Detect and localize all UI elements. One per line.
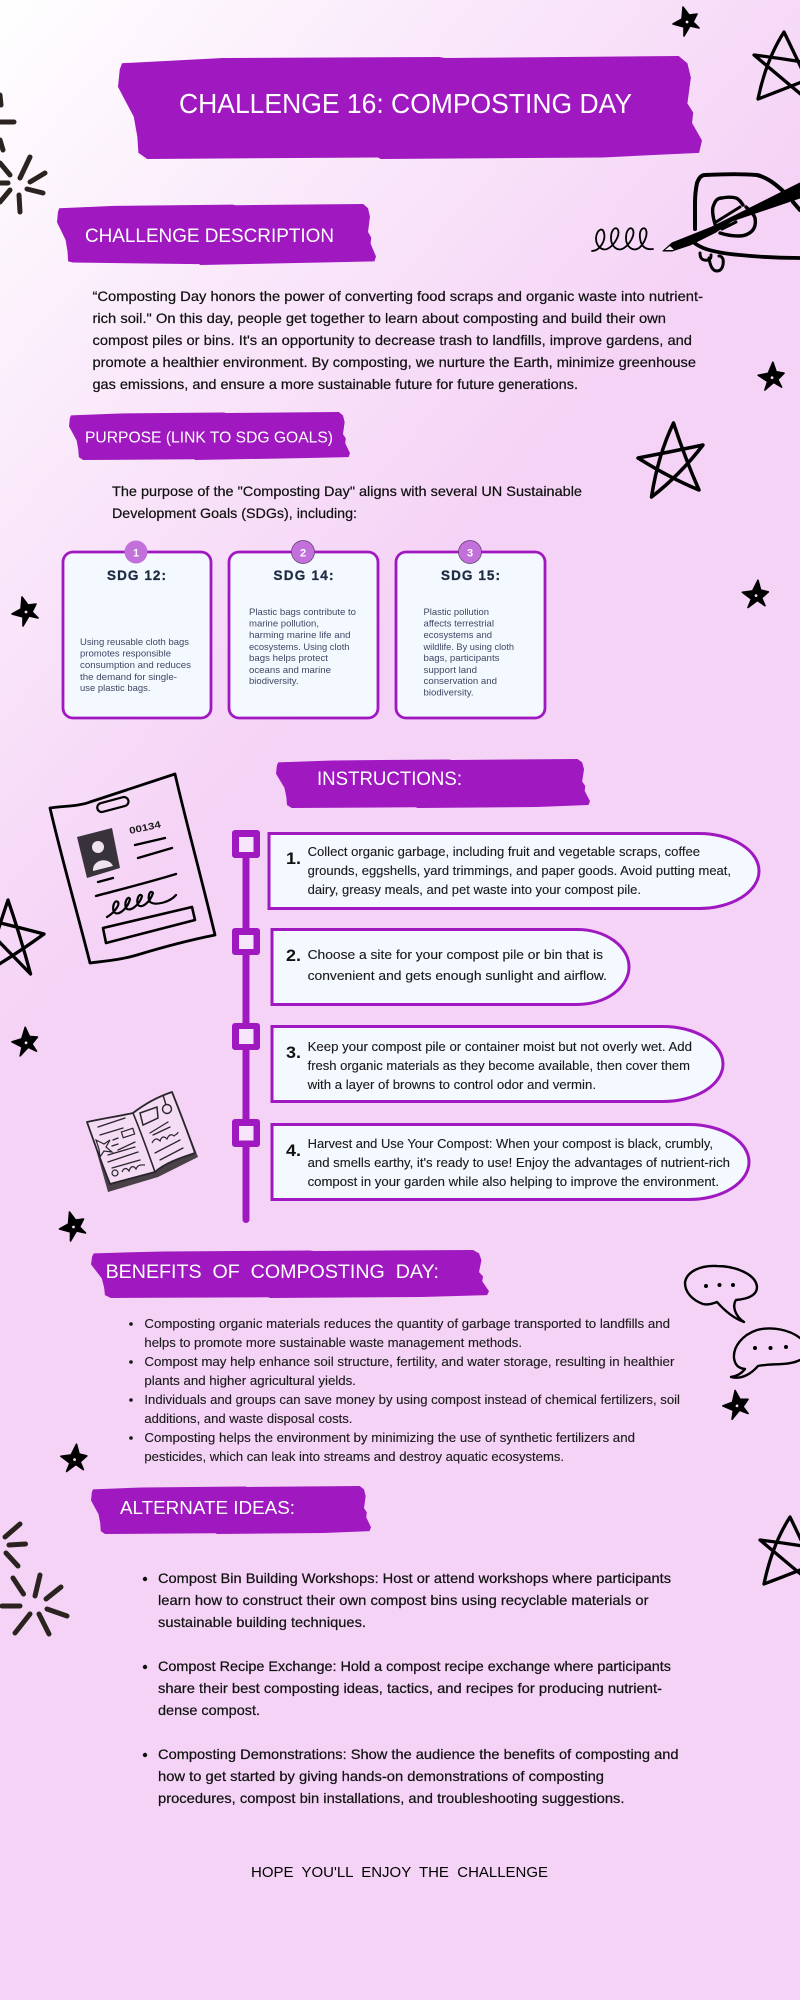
- panel: step 4: Harvest and Use Your Compost: When your compost is black, crumbly,: [308, 1136, 713, 1151]
- icon: small star right middle: [738, 576, 773, 613]
- text block: benefits list: Composting organic materials reduces the quantity of garbage transported to landfills and: [144, 1316, 670, 1331]
- text block: description: rich soil." On this day, people get together to learn about composting and build their own: [92, 310, 666, 326]
- text block: description: promote a healthier environment. By composting, we nurture the Earth, minimize greenhouse: [92, 354, 696, 370]
- text block: benefits list: additions, and waste disposal costs.: [144, 1411, 352, 1426]
- section heading: challenge description: [57, 204, 376, 265]
- panel: SDG 15 card: conservation and: [424, 676, 497, 687]
- panel: SDG 15 card: bags, participants: [424, 653, 500, 664]
- panel: SDG 15 card: affects terrestrial: [424, 619, 494, 630]
- section heading: alternate ideas: ALTERNATE IDEAS:: [120, 1498, 295, 1518]
- panel: step 4: and smells earthy, it's ready to use! Enjoy the advantages of nutrient-rich: [308, 1155, 730, 1170]
- panel: SDG 14 card: harming marine life and: [249, 630, 350, 641]
- section heading: instructions: INSTRUCTIONS:: [317, 769, 462, 790]
- text block: alternate ideas list: [143, 1570, 679, 1806]
- text block: alternate ideas list: dense compost.: [158, 1702, 260, 1718]
- panel: SDG 12 card: [63, 540, 211, 718]
- text block: description: compost piles or bins. It's an opportunity to decrease trash to landfills, improve gardens, and: [92, 332, 692, 348]
- icon: open book doodle: [87, 1092, 198, 1192]
- text block: description: [92, 288, 703, 392]
- icon: ID badge doodle: [50, 774, 215, 963]
- panel: step 3: Keep your compost pile or container moist but not overly wet. Add: [308, 1039, 692, 1054]
- icon: small star beside bubbles: [721, 1389, 751, 1421]
- text block: alternate ideas list: procedures, compost bin installations, and troubleshooting suggestions.: [158, 1790, 624, 1806]
- icon: small star right: [754, 359, 788, 395]
- text block: benefits list: Compost may help enhance soil structure, fertility, and water storage, resulting in healthier: [144, 1354, 675, 1369]
- panel: SDG 12 card: the demand for single-: [80, 672, 177, 683]
- panel: SDG 14 card: ecosystems. Using cloth: [249, 642, 350, 653]
- text block: benefits list: [129, 1316, 680, 1464]
- icon: star outline left: [0, 900, 44, 974]
- section heading: purpose: PURPOSE (LINK TO SDG GOALS): [85, 430, 333, 446]
- panel: step 2: convenient and gets enough sunlight and airflow.: [308, 968, 607, 983]
- panel: step 4: 4.: [286, 1141, 301, 1160]
- text block: benefits list: pesticides, which can leak into streams and destroy aquatic ecosystems.: [144, 1449, 564, 1464]
- icon: star outline top right: [754, 32, 800, 112]
- title banner: [118, 56, 702, 159]
- icon: sparkle lower left: [2, 1524, 67, 1634]
- icon: ID badge doodle: 00134: [128, 819, 163, 837]
- text block: purpose intro: Development Goals (SDGs), including:: [112, 505, 357, 521]
- icon: speech bubble lower: [731, 1328, 800, 1378]
- closing line: HOPE YOU'LL ENJOY THE CHALLENGE: [251, 1864, 548, 1881]
- panel: step 2: [272, 930, 629, 1004]
- panel: SDG 15 card: wildlife. By using cloth: [423, 642, 514, 653]
- text block: benefits list: Individuals and groups can save money by using compost instead of chemical fertilizers, soil: [144, 1392, 680, 1407]
- panel: SDG 12 card: Using reusable cloth bags: [80, 637, 189, 648]
- icon: hand writing with pen: [592, 174, 800, 271]
- panel: SDG 14 card: marine pollution,: [249, 619, 319, 630]
- text block: alternate ideas list: learn how to construct their own compost bins using recyclable materials or: [158, 1592, 649, 1608]
- title text: CHALLENGE 16: COMPOSTING DAY: [179, 88, 632, 119]
- text block: benefits list: Composting helps the environment by minimizing the use of synthetic fertilizers and: [144, 1430, 635, 1445]
- panel: step 1: dairy, greasy meals, and pet waste into your compost pile.: [308, 882, 641, 897]
- panel: SDG 15 card: 3: [467, 548, 473, 560]
- text block: description: “Composting Day honors the power of converting food scraps and organic waste into nutrient-: [92, 288, 703, 304]
- icon: small star left lower: [9, 1025, 41, 1059]
- panel: SDG 14 card: SDG 14:: [274, 568, 334, 583]
- panel: SDG 15 card: [396, 540, 545, 718]
- text block: alternate ideas list: sustainable building techniques.: [158, 1614, 366, 1630]
- panel: SDG 14 card: 2: [300, 548, 306, 560]
- chart: vertical timeline: [232, 830, 260, 1223]
- panel: SDG 15 card: SDG 15:: [441, 568, 500, 583]
- text block: benefits list: helps to promote more sustainable waste management methods.: [144, 1335, 522, 1350]
- icon: star outline lower right: [760, 1517, 800, 1597]
- panel: step 3: fresh organic materials as they become available, then cover them: [308, 1058, 690, 1073]
- panel: SDG 14 card: [229, 540, 378, 718]
- section heading: benefits: BENEFITS OF COMPOSTING DAY:: [106, 1262, 439, 1283]
- panel: SDG 12 card: 1: [133, 548, 139, 560]
- text block: alternate ideas list: Composting Demonstrations: Show the audience the benefits of composting and: [158, 1746, 678, 1762]
- section heading: purpose: [69, 412, 350, 460]
- panel: SDG 12 card: promotes responsible: [80, 649, 171, 660]
- icon: speech bubble upper: [685, 1266, 757, 1322]
- text block: alternate ideas list: Compost Bin Building Workshops: Host or attend workshops where participants: [158, 1570, 671, 1586]
- panel: SDG 12 card: SDG 12:: [107, 568, 166, 583]
- panel: step 4: [272, 1124, 749, 1200]
- icon: small star top: [673, 7, 699, 36]
- panel: SDG 15 card: support land: [424, 665, 477, 676]
- panel: step 2: 2.: [286, 946, 301, 965]
- text block: alternate ideas list: how to get started by giving hands-on demonstrations of composting: [158, 1768, 604, 1784]
- panel: step 1: grounds, eggshells, yard trimmings, and paper goods. Avoid putting meat,: [308, 863, 731, 878]
- text block: purpose intro: The purpose of the "Composting Day" aligns with several UN Sustainable: [112, 483, 582, 499]
- panel: SDG 15 card: biodiversity.: [424, 688, 474, 698]
- panel: SDG 14 card: bags helps protect: [249, 653, 328, 664]
- panel: SDG 14 card: oceans and marine: [249, 665, 331, 676]
- panel: step 3: with a layer of browns to control odor and vermin.: [307, 1077, 596, 1092]
- icon: star outline middle right: [638, 423, 703, 497]
- panel: step 1: 1.: [286, 849, 301, 868]
- panel: SDG 14 card: biodiversity.: [249, 676, 298, 687]
- panel: step 2: Choose a site for your compost pile or bin that is: [308, 947, 604, 962]
- text block: alternate ideas list: Compost Recipe Exchange: Hold a compost recipe exchange where participants: [158, 1658, 671, 1674]
- icon: small star beside list: [56, 1440, 91, 1477]
- icon: sparkle top left: [0, 95, 45, 212]
- panel: SDG 14 card: Plastic bags contribute to: [249, 607, 356, 618]
- section heading: challenge description: CHALLENGE DESCRIPTION: [85, 226, 334, 247]
- section heading: instructions: [276, 759, 590, 808]
- section heading: benefits: [91, 1250, 489, 1298]
- text block: benefits list: plants and higher agricultural yields.: [144, 1373, 356, 1388]
- text block: alternate ideas list: share their best composting ideas, tactics, and recipes for producing nutrient-: [158, 1680, 662, 1696]
- panel: step 1: [269, 834, 759, 908]
- section heading: alternate ideas: [91, 1486, 371, 1534]
- panel: SDG 15 card: ecosystems and: [424, 630, 492, 641]
- panel: step 3: [272, 1026, 723, 1102]
- panel: SDG 12 card: use plastic bags.: [80, 683, 150, 694]
- panel: SDG 15 card: Plastic pollution: [424, 607, 489, 618]
- text block: purpose intro: [112, 483, 582, 521]
- panel: step 3: 3.: [286, 1043, 301, 1062]
- panel: step 1: Collect organic garbage, including fruit and vegetable scraps, coffee: [308, 844, 700, 859]
- icon: small star below book: [60, 1212, 86, 1241]
- panel: step 4: compost in your garden while also helping to improve the environment.: [308, 1174, 719, 1189]
- text block: description: gas emissions, and ensure a more sustainable future for future generations.: [92, 376, 578, 392]
- panel: SDG 12 card: consumption and reduces: [80, 660, 191, 671]
- icon: small star left: [12, 597, 38, 626]
